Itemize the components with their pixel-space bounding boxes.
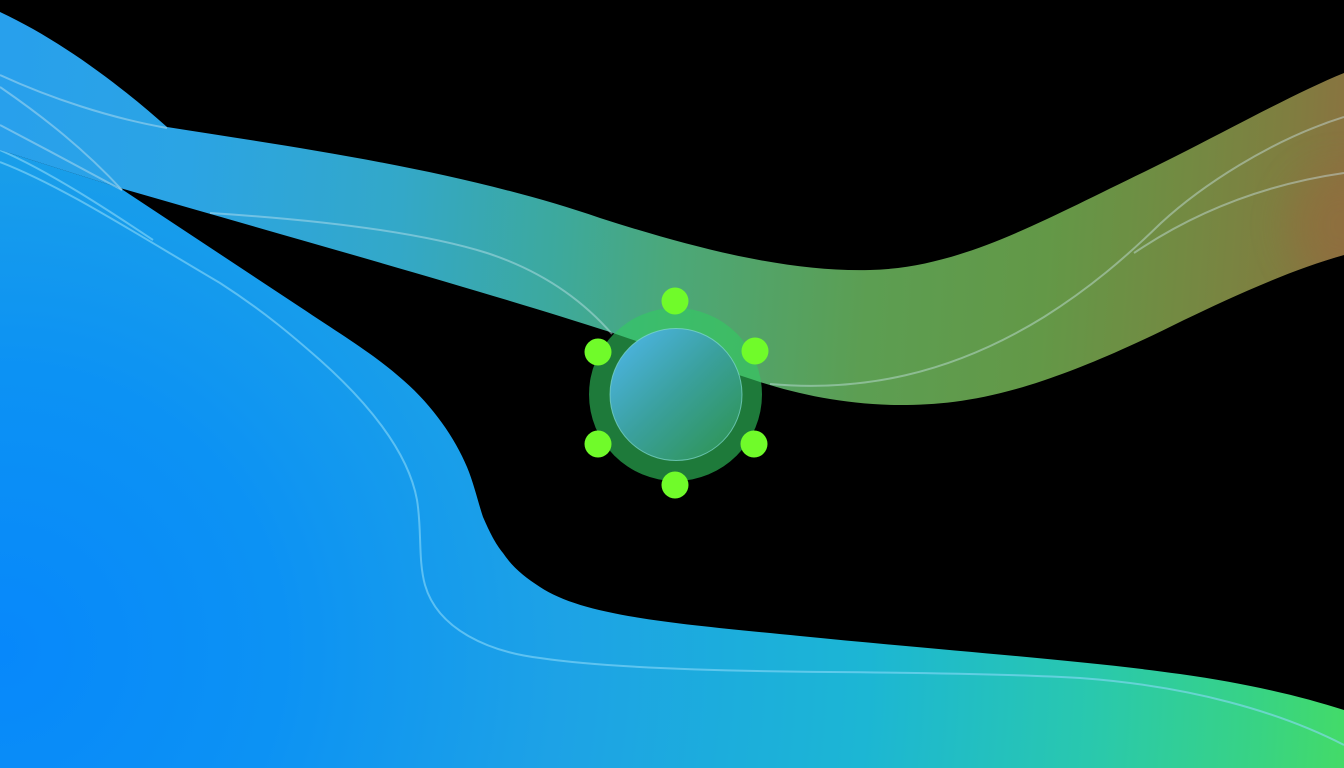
satellite dots <box>584 288 768 498</box>
lower band flow lines <box>0 150 1344 745</box>
outer ring <box>589 308 762 481</box>
inner core circle <box>610 328 742 460</box>
upper ribbon flow lines <box>0 75 1344 386</box>
warm glow at right end of ribbon <box>1312 255 1344 265</box>
upper ribbon <box>0 12 1344 405</box>
central node <box>584 288 768 498</box>
